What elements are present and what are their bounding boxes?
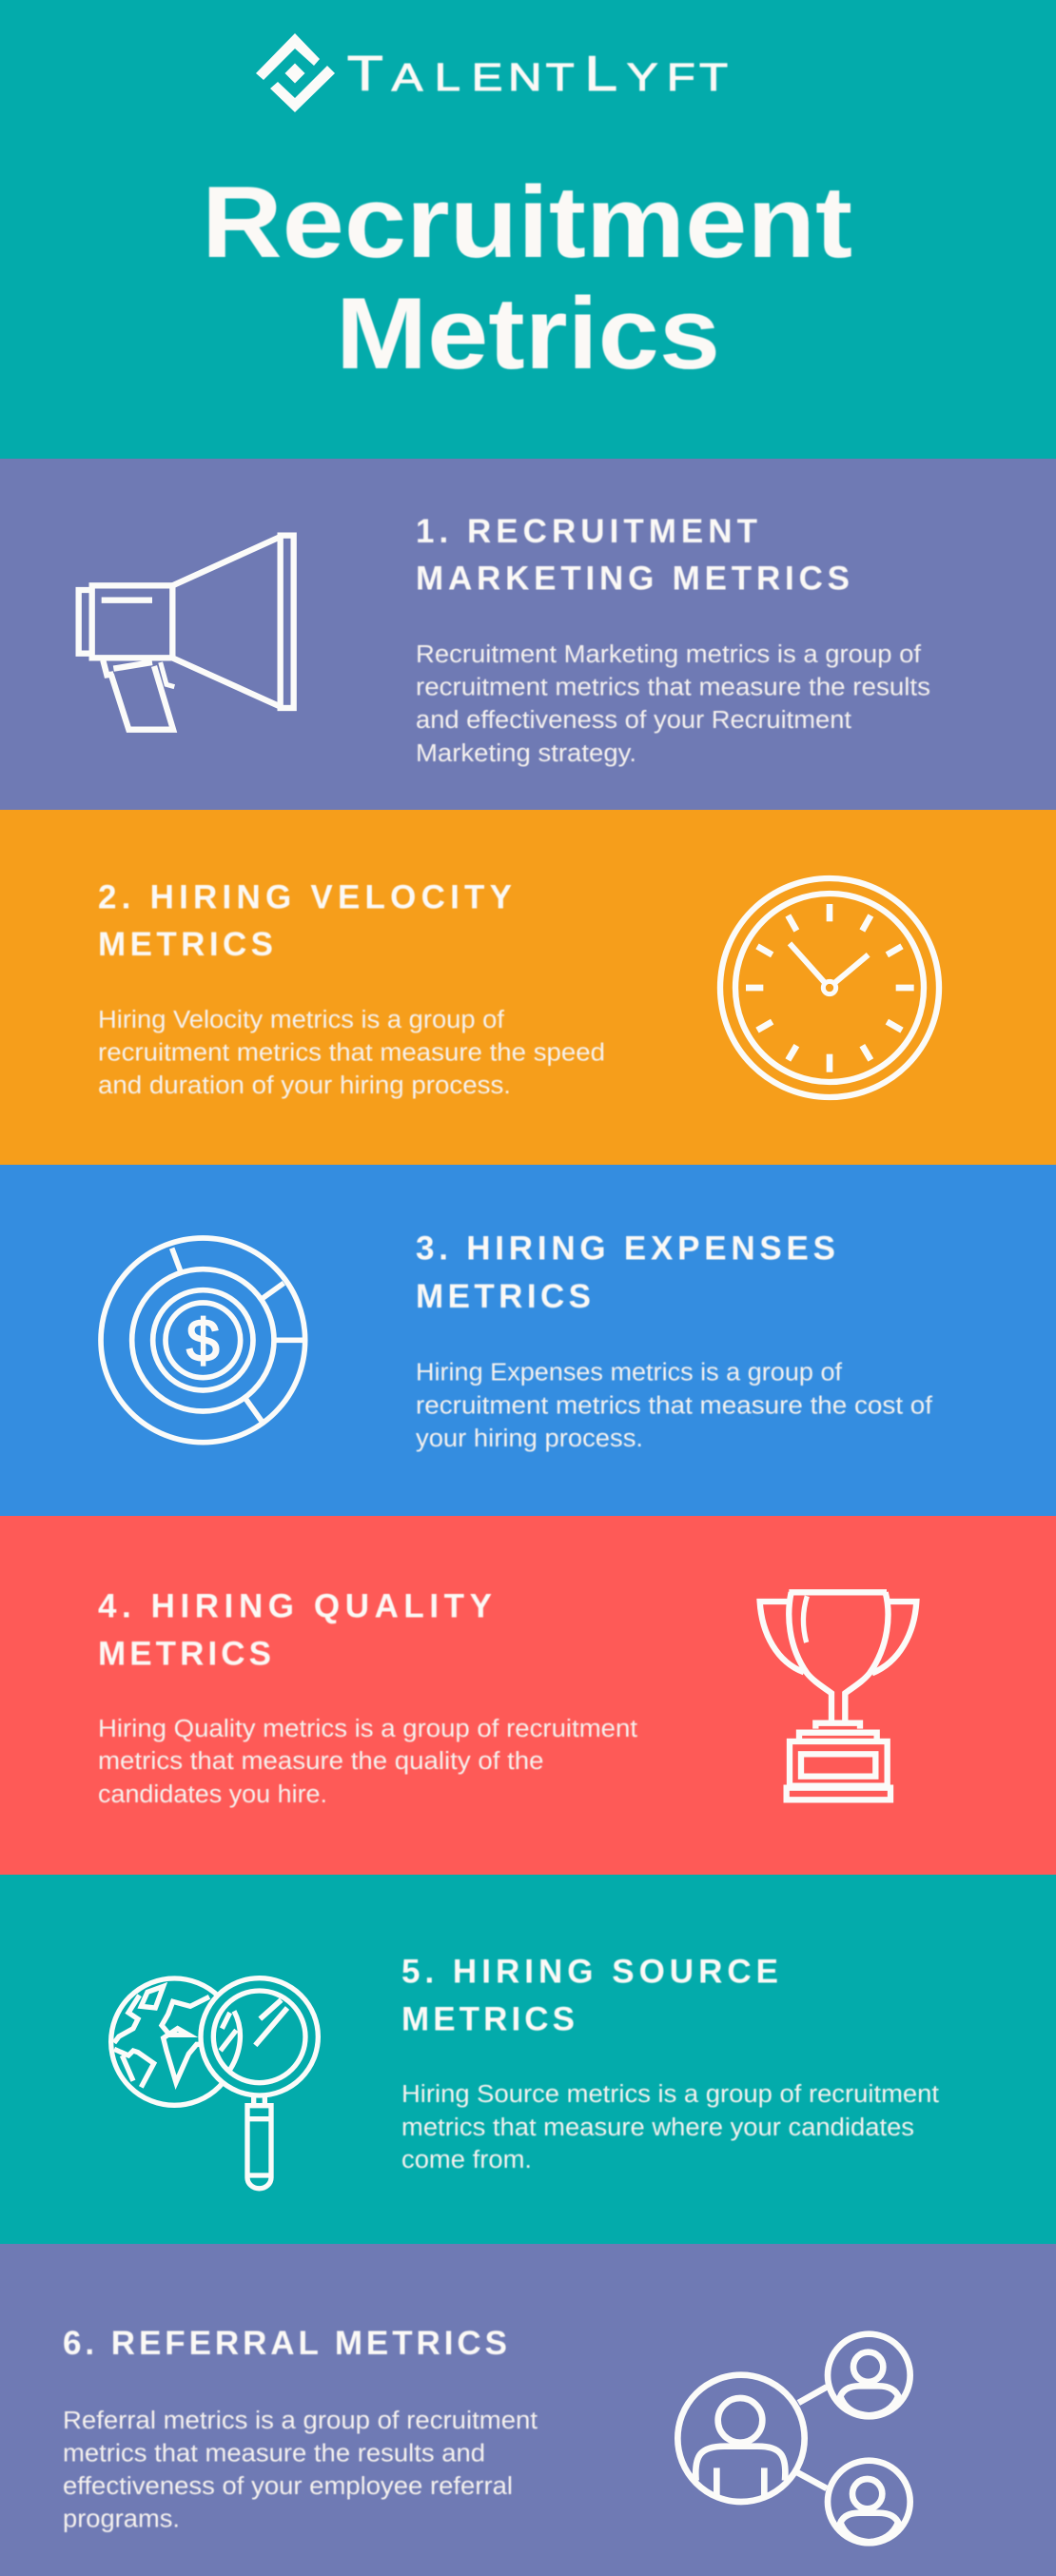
logo: TalentLyft xyxy=(256,33,728,112)
text block: hiring source description: metrics that measure where your candidates xyxy=(401,2114,914,2141)
text block: hiring quality description xyxy=(98,1716,637,1808)
text block: hiring source description: Hiring Source metrics is a group of recruitment xyxy=(401,2081,939,2108)
title: Recruitment xyxy=(202,165,852,279)
icon: trophy xyxy=(760,1592,916,1799)
heading: recruitment marketing metrics: 1. RECRUITMENT xyxy=(416,513,757,550)
icon: megaphone xyxy=(79,536,294,730)
logo wordmark: L xyxy=(584,47,617,102)
text block: recruitment marketing description xyxy=(416,641,930,767)
text block: recruitment marketing description: recruitment metrics that measure the results xyxy=(416,674,930,700)
text block: hiring quality description: candidates you hire. xyxy=(98,1781,327,1808)
heading: hiring expenses metrics: 3. HIRING EXPENSES xyxy=(416,1229,835,1268)
panel: 4. hiring quality metrics xyxy=(0,1516,1056,1875)
icon: globe and magnifying glass xyxy=(111,1978,318,2189)
text block: hiring velocity description xyxy=(98,1007,605,1099)
heading: hiring source metrics: METRICS xyxy=(401,2000,575,2038)
heading: recruitment marketing metrics: MARKETING METRICS xyxy=(416,560,850,598)
text block: referral description: effectiveness of your employee referral xyxy=(63,2473,513,2500)
heading: recruitment marketing metrics xyxy=(416,513,850,598)
heading: hiring velocity metrics: METRICS xyxy=(98,926,273,963)
heading: hiring quality metrics xyxy=(98,1587,492,1673)
heading: hiring quality metrics: 4. HIRING QUALITY xyxy=(98,1587,492,1625)
logo wordmark xyxy=(347,47,728,102)
text block: recruitment marketing description: Marketing strategy. xyxy=(416,740,636,767)
text block: hiring source description xyxy=(401,2081,939,2173)
text block: referral description: metrics that measure the results and xyxy=(63,2440,485,2467)
panel: 3. hiring expenses metrics xyxy=(0,1165,1056,1516)
panel: 1. recruitment marketing metrics xyxy=(0,459,1056,810)
text block: hiring source description: come from. xyxy=(401,2147,532,2173)
icon: dollar target chart: $ xyxy=(186,1308,220,1375)
icon: clock xyxy=(720,878,939,1097)
panel: header xyxy=(0,0,1056,459)
text block: hiring expenses description: your hiring process. xyxy=(416,1426,643,1452)
panel: 5. hiring source metrics xyxy=(0,1875,1056,2244)
icon: referral network of people xyxy=(677,2334,910,2543)
text block: hiring expenses description: Hiring Expenses metrics is a group of xyxy=(416,1359,843,1386)
heading: hiring quality metrics: METRICS xyxy=(98,1635,271,1673)
heading: hiring expenses metrics xyxy=(416,1229,835,1315)
text block: hiring quality description: Hiring Quality metrics is a group of recruitment xyxy=(98,1716,637,1742)
text block: hiring velocity description: Hiring Velocity metrics is a group of xyxy=(98,1007,505,1033)
logo wordmark: YFT xyxy=(627,55,728,99)
logo wordmark: ALENT xyxy=(392,55,575,99)
text block: hiring quality description: metrics that measure the quality of the xyxy=(98,1748,544,1775)
text block: referral description: Referral metrics is a group of recruitment xyxy=(63,2408,538,2434)
heading: referral metrics: 6. REFERRAL METRICS xyxy=(63,2325,507,2362)
title xyxy=(202,165,852,390)
text block: hiring expenses description: recruitment metrics that measure the cost of xyxy=(416,1393,933,1420)
title: Metrics xyxy=(336,276,720,390)
text block: hiring velocity description: recruitment metrics that measure the speed xyxy=(98,1039,605,1066)
text block: referral description: programs. xyxy=(63,2507,180,2533)
text block: hiring velocity description: and duration of your hiring process. xyxy=(98,1072,511,1099)
heading: hiring source metrics xyxy=(401,1953,778,2038)
heading: hiring velocity metrics xyxy=(98,879,512,963)
text block: recruitment marketing description: Recruitment Marketing metrics is a group of xyxy=(416,641,922,668)
heading: hiring expenses metrics: METRICS xyxy=(416,1278,591,1315)
text block: hiring expenses description xyxy=(416,1359,933,1452)
panel: 6. referral metrics xyxy=(0,2244,1056,2576)
heading: hiring velocity metrics: 2. HIRING VELOCITY xyxy=(98,879,512,915)
text block: recruitment marketing description: and effectiveness of your Recruitment xyxy=(416,707,851,734)
heading: hiring source metrics: 5. HIRING SOURCE xyxy=(401,1953,778,1991)
icon: dollar target chart xyxy=(101,1238,305,1443)
icon: logo diamond mark xyxy=(256,33,335,112)
logo wordmark: T xyxy=(347,47,383,102)
text block: referral description xyxy=(63,2408,538,2533)
panel: 2. hiring velocity metrics xyxy=(0,810,1056,1165)
